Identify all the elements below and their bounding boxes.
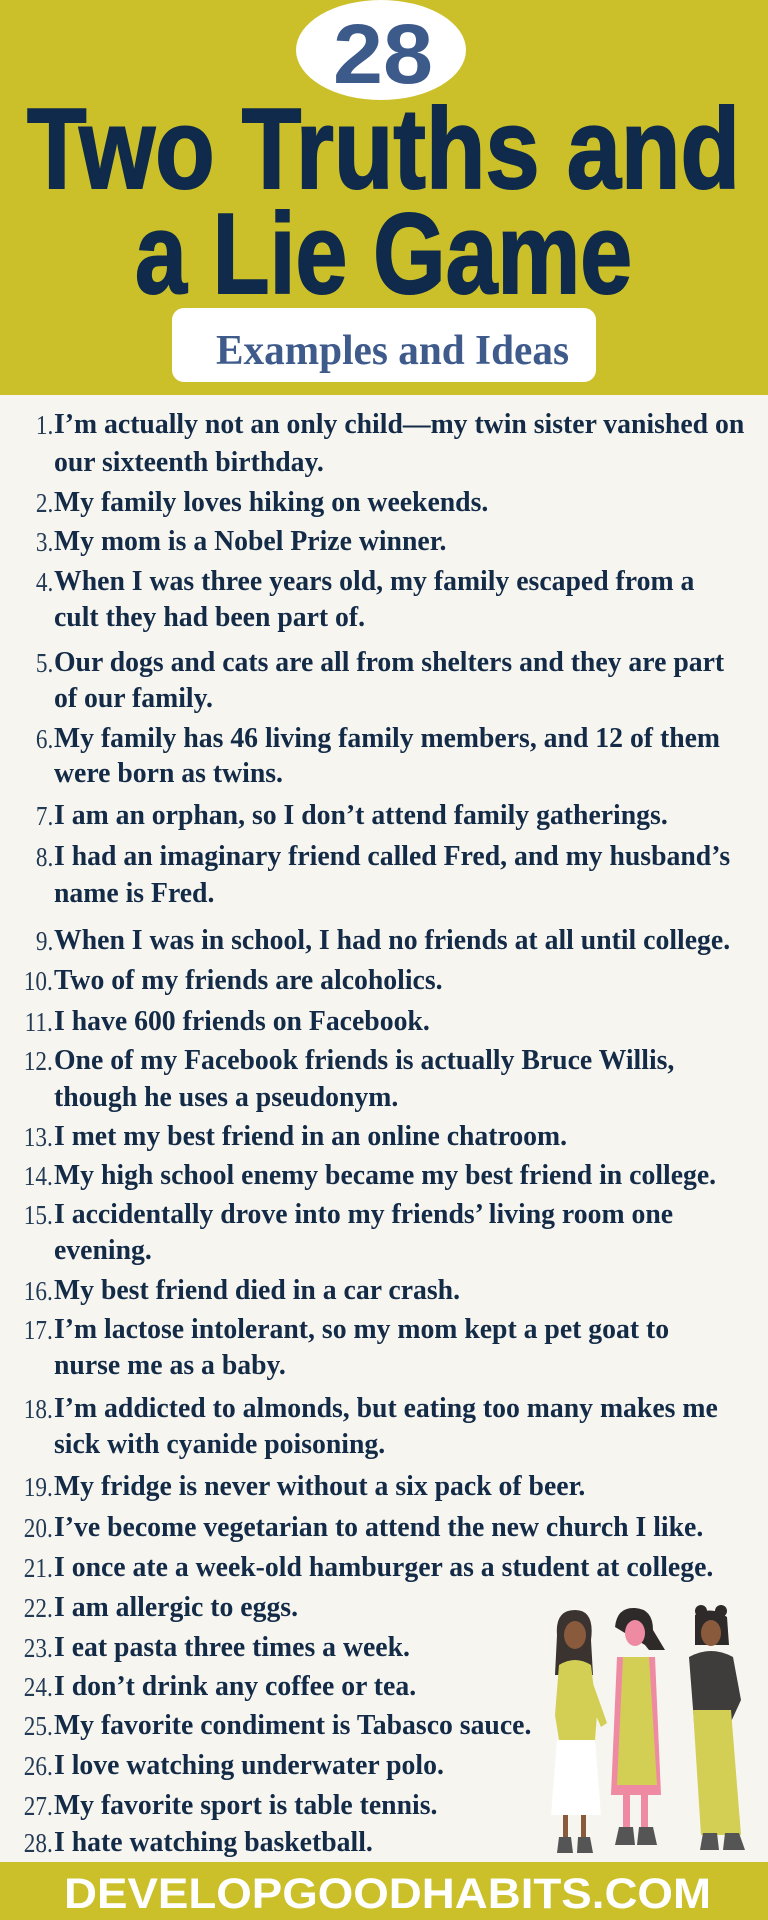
list of 28 examples: 5. xyxy=(36,648,53,678)
list of 28 examples: 8. xyxy=(36,842,53,872)
woman 1 xyxy=(551,1610,607,1853)
list of 28 examples: When I was three years old, my family escaped from a xyxy=(54,566,694,597)
list of 28 examples xyxy=(24,409,744,1858)
list of 28 examples: name is Fred. xyxy=(54,878,214,909)
list of 28 examples: cult they had been part of. xyxy=(54,602,365,633)
list of 28 examples: My family loves hiking on weekends. xyxy=(54,487,488,518)
list of 28 examples: I accidentally drove into my friends’ living room one xyxy=(54,1199,673,1230)
list of 28 examples: 11. xyxy=(25,1007,53,1037)
list of 28 examples: I had an imaginary friend called Fred, and my husband’s xyxy=(54,841,730,872)
footer: website: DEVELOPGOODHABITS.COM xyxy=(64,1870,711,1918)
list of 28 examples: I met my best friend in an online chatroom. xyxy=(54,1121,567,1152)
list of 28 examples: 17. xyxy=(24,1315,53,1345)
list of 28 examples: 18. xyxy=(24,1394,53,1424)
woman 2 xyxy=(611,1608,665,1845)
list of 28 examples: 24. xyxy=(24,1672,53,1702)
footer: website xyxy=(0,1862,768,1920)
list of 28 examples: were born as twins. xyxy=(54,758,283,789)
list of 28 examples: 26. xyxy=(24,1751,53,1781)
list of 28 examples: My fridge is never without a six pack of beer. xyxy=(54,1471,585,1502)
list of 28 examples: sick with cyanide poisoning. xyxy=(54,1429,385,1460)
list of 28 examples: I eat pasta three times a week. xyxy=(54,1632,410,1663)
list of 28 examples: 15. xyxy=(24,1200,53,1230)
subtitle box: Examples and Ideas xyxy=(216,328,569,374)
list of 28 examples: 7. xyxy=(36,801,53,831)
list of 28 examples: 10. xyxy=(24,966,53,996)
list of 28 examples: Our dogs and cats are all from shelters and they are part xyxy=(54,647,724,678)
illustration: three women xyxy=(551,1605,745,1853)
list of 28 examples: I hate watching basketball. xyxy=(54,1827,373,1858)
list of 28 examples: though he uses a pseudonym. xyxy=(54,1082,398,1113)
list of 28 examples: My best friend died in a car crash. xyxy=(54,1275,460,1306)
list of 28 examples: 6. xyxy=(36,724,53,754)
list of 28 examples: 28. xyxy=(24,1828,53,1858)
list of 28 examples: of our family. xyxy=(54,683,213,714)
list of 28 examples: One of my Facebook friends is actually Bruce Willis, xyxy=(54,1045,674,1076)
list of 28 examples: I am allergic to eggs. xyxy=(54,1592,298,1623)
list of 28 examples: I have 600 friends on Facebook. xyxy=(54,1006,430,1037)
list of 28 examples: When I was in school, I had no friends at all until college. xyxy=(54,925,730,956)
list of 28 examples: 25. xyxy=(24,1711,53,1741)
list of 28 examples: 19. xyxy=(24,1472,53,1502)
list of 28 examples: 16. xyxy=(24,1276,53,1306)
list of 28 examples: My family has 46 living family members, and 12 of them xyxy=(54,723,720,754)
list of 28 examples: I’m addicted to almonds, but eating too many makes me xyxy=(54,1393,718,1424)
list of 28 examples: I’m lactose intolerant, so my mom kept a pet goat to xyxy=(54,1314,669,1345)
list of 28 examples: 2. xyxy=(36,488,53,518)
list of 28 examples: 4. xyxy=(36,567,53,597)
list of 28 examples: I love watching underwater polo. xyxy=(54,1750,444,1781)
list of 28 examples: My high school enemy became my best friend in college. xyxy=(54,1160,716,1191)
list of 28 examples: 1. xyxy=(36,410,53,440)
list of 28 examples: I don’t drink any coffee or tea. xyxy=(54,1671,416,1702)
list of 28 examples: 13. xyxy=(24,1122,53,1152)
list of 28 examples: I am an orphan, so I don’t attend family gatherings. xyxy=(54,800,668,831)
title xyxy=(27,86,740,318)
list of 28 examples: I’ve become vegetarian to attend the new church I like. xyxy=(54,1512,703,1543)
list of 28 examples: 14. xyxy=(24,1161,53,1191)
list of 28 examples: 27. xyxy=(24,1791,53,1821)
list of 28 examples: 20. xyxy=(24,1513,53,1543)
list of 28 examples: 9. xyxy=(36,926,53,956)
title: a Lie Game xyxy=(135,191,632,318)
list of 28 examples: 12. xyxy=(24,1046,53,1076)
list of 28 examples: 21. xyxy=(24,1553,53,1583)
list of 28 examples: our sixteenth birthday. xyxy=(54,447,324,478)
woman 3 xyxy=(689,1605,745,1850)
list of 28 examples: 22. xyxy=(24,1593,53,1623)
list of 28 examples: My mom is a Nobel Prize winner. xyxy=(54,526,446,557)
list of 28 examples: I once ate a week-old hamburger as a student at college. xyxy=(54,1552,713,1583)
badge: 28: 28 xyxy=(333,7,433,101)
badge: 28 xyxy=(296,0,466,101)
list of 28 examples: 3. xyxy=(36,527,53,557)
list of 28 examples: evening. xyxy=(54,1235,152,1266)
list of 28 examples: nurse me as a baby. xyxy=(54,1350,286,1381)
list of 28 examples: Two of my friends are alcoholics. xyxy=(54,965,443,996)
list of 28 examples: I’m actually not an only child—my twin sister vanished on xyxy=(54,409,744,440)
list of 28 examples: 23. xyxy=(24,1633,53,1663)
list of 28 examples: My favorite sport is table tennis. xyxy=(54,1790,437,1821)
header xyxy=(0,0,768,395)
subtitle box xyxy=(172,308,596,382)
list of 28 examples: My favorite condiment is Tabasco sauce. xyxy=(54,1710,531,1741)
